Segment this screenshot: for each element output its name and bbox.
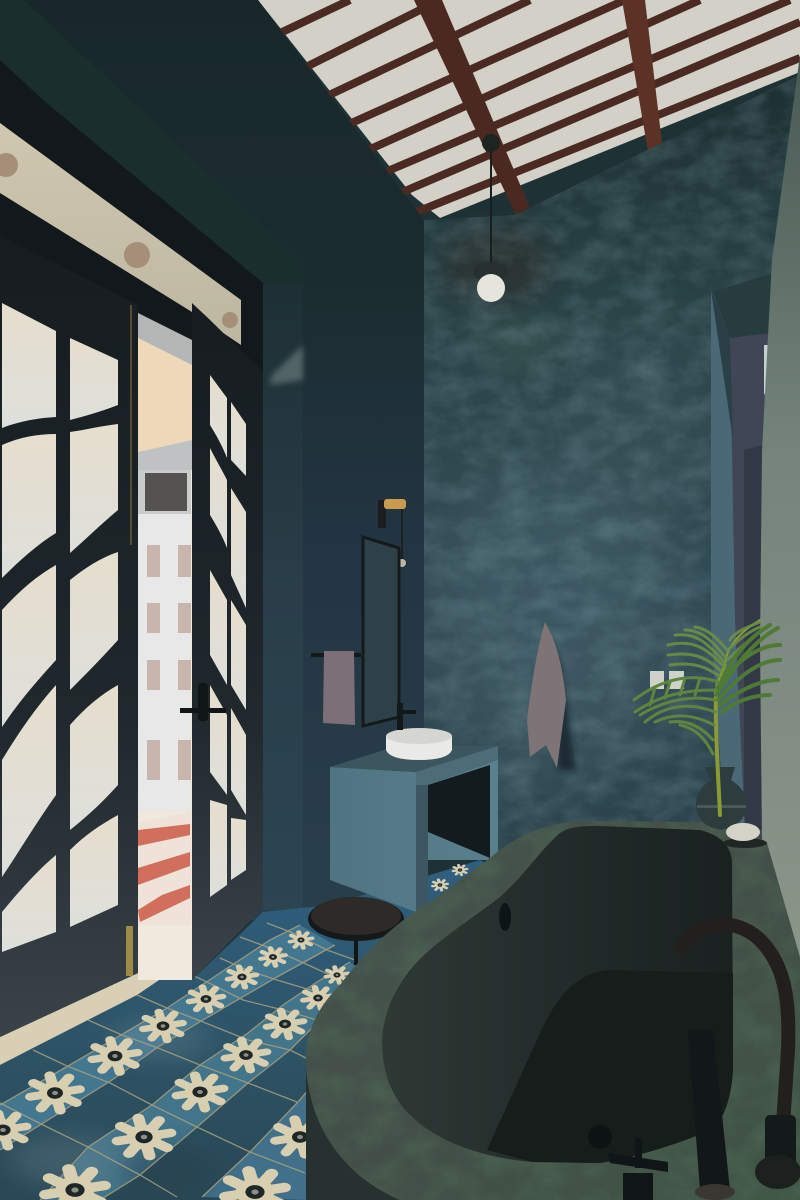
view through doorway <box>138 310 192 980</box>
bathtub <box>300 815 800 1200</box>
right door leaf <box>180 303 263 980</box>
hook towel <box>527 622 576 770</box>
vanity unit <box>330 745 498 915</box>
mirror <box>363 537 399 726</box>
back wall <box>424 70 800 870</box>
right wall <box>760 55 800 960</box>
right dense frond <box>716 625 780 712</box>
wall sconce <box>378 499 406 567</box>
door frame and transom window <box>0 60 263 372</box>
shell on tub ledge <box>723 823 767 848</box>
palm plant <box>634 620 780 815</box>
ceiling with beams <box>258 0 800 218</box>
door handle <box>180 683 226 721</box>
ceiling lamp <box>473 134 509 302</box>
left wall <box>0 0 424 920</box>
cream threshold <box>0 930 192 1065</box>
washbasin and tap <box>386 703 452 760</box>
left door <box>0 235 138 1037</box>
towel rail and hand towel <box>311 651 361 725</box>
vase <box>696 767 747 830</box>
wall lintel above door <box>0 0 303 285</box>
tub tap <box>608 924 800 1200</box>
switch plate <box>650 671 684 689</box>
small round side table <box>308 897 404 965</box>
left drooping frond <box>634 678 718 754</box>
floor tiles <box>0 860 500 1200</box>
iron grille <box>145 473 187 511</box>
upper fan frond <box>668 622 760 678</box>
window niche on right <box>711 273 775 840</box>
